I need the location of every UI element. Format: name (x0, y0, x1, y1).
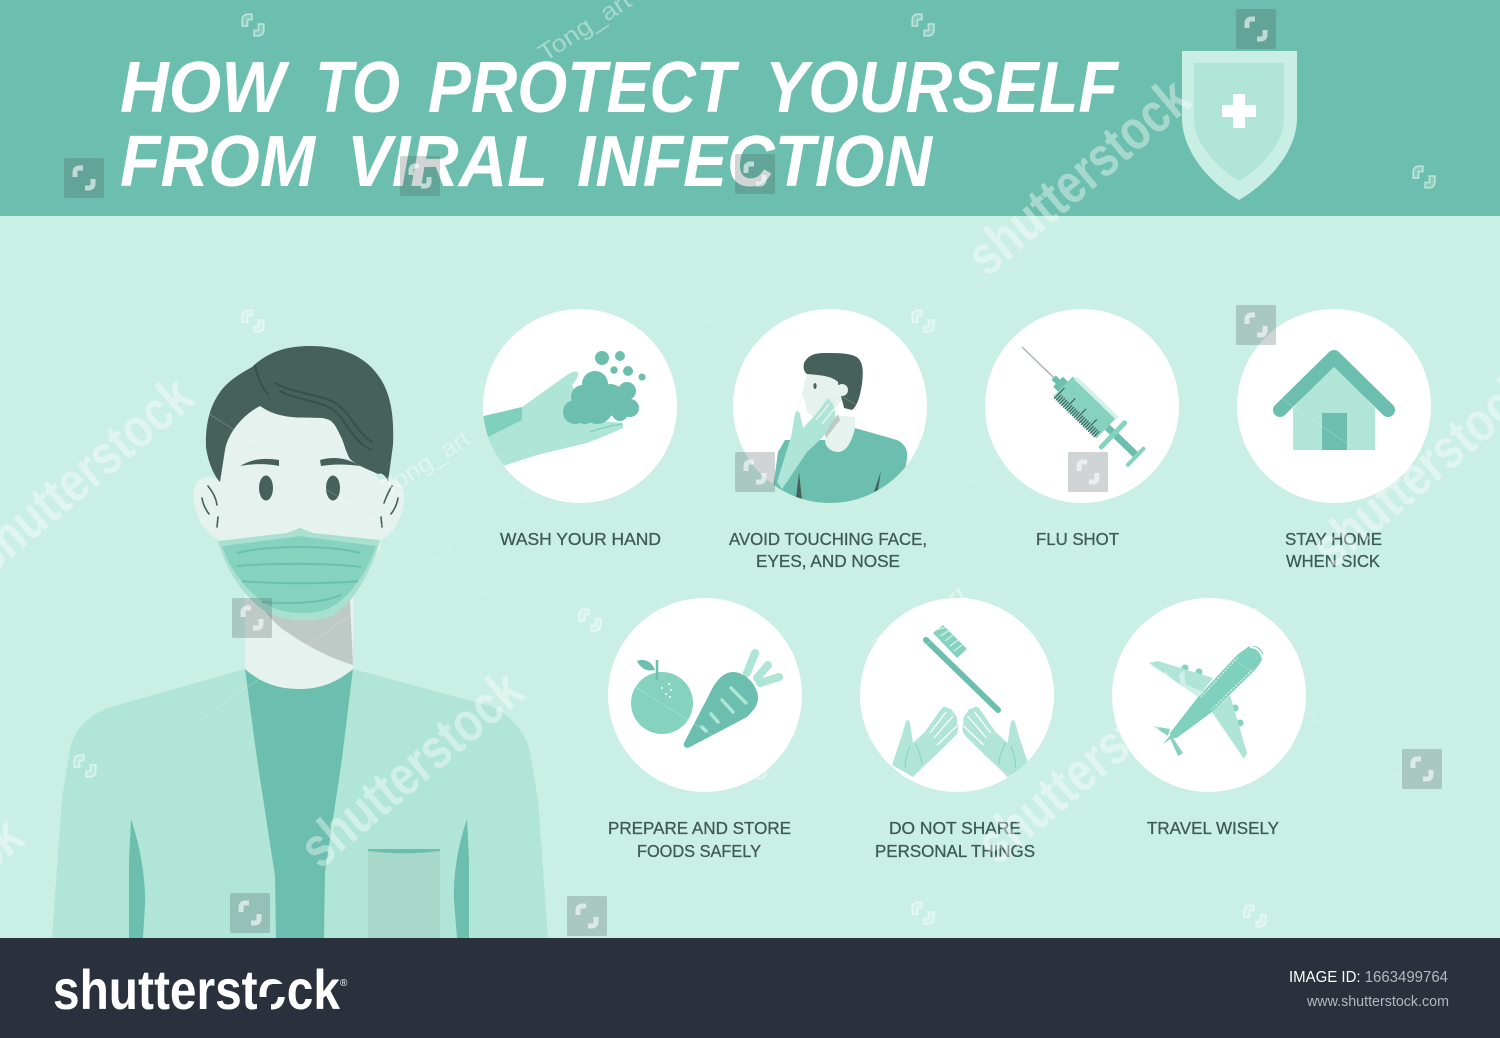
house body (1293, 364, 1375, 450)
caption: do not share: DO NOT SHARE (889, 818, 1021, 838)
title (120, 48, 1120, 202)
soap foam (563, 351, 646, 424)
caption: flu shot: FLU SHOT (1036, 529, 1119, 549)
caption: avoid touching face: EYES, AND NOSE (756, 551, 900, 571)
header band (0, 0, 1500, 216)
icon circle: wash your hand (480, 309, 677, 503)
ear of small figure (838, 384, 848, 396)
plane tail (1153, 726, 1183, 756)
jacket creases (129, 819, 469, 938)
sleeve folds (796, 471, 881, 500)
left ear (194, 477, 228, 541)
barrel highlight (1074, 376, 1119, 420)
ear details (202, 486, 398, 527)
caption: wash your hand: WASH YOUR HAND (500, 529, 661, 549)
orange (631, 672, 693, 734)
plane wings (1149, 661, 1247, 759)
caption: travel wisely: TRAVEL WISELY (1147, 818, 1279, 838)
mask pleats (237, 547, 361, 603)
raised hand (777, 398, 835, 489)
plunger plate (1125, 446, 1146, 467)
gloved hands (892, 707, 1029, 777)
icon circle: do not share personal things (860, 598, 1054, 792)
caption: avoid touching face (729, 529, 927, 571)
right ear (372, 478, 404, 541)
carrot greens (747, 653, 779, 683)
toothbrush bristles (933, 625, 967, 658)
footer logo: ® (340, 978, 348, 989)
pocket edge (368, 849, 440, 853)
illustration: man wearing a face mask (52, 346, 548, 938)
watermark overlay: Tong_art (377, 425, 475, 502)
title: PROTECT (428, 48, 740, 128)
watermark overlay: shutterstock (964, 653, 1212, 875)
hair strands (255, 366, 372, 450)
shirt of small figure (774, 428, 908, 503)
caption: prepare and store: PREPARE AND STORE (608, 818, 791, 838)
icon circle: flu shot syringe (985, 309, 1179, 503)
shirt (245, 669, 353, 938)
title: VIRAL (347, 122, 548, 202)
footer logo: shutterstock (53, 958, 341, 1021)
face (220, 402, 380, 590)
plane fuselage (1170, 646, 1263, 738)
caption: stay home when sick: WHEN SICK (1286, 551, 1380, 571)
mask fabric (222, 536, 376, 613)
bristle lines (936, 627, 962, 651)
eye of small figure (813, 383, 817, 389)
footer image id: IMAGE ID: 1663499764 (1289, 969, 1448, 986)
house door (1322, 413, 1347, 450)
caption: prepare and store (608, 818, 791, 861)
footer website: www.shutterstock.com (1306, 994, 1449, 1010)
neck shadow (824, 414, 840, 438)
flange (1098, 419, 1128, 450)
title: YOURSELF (765, 48, 1120, 128)
watermark overlay: shutterstock (287, 657, 535, 879)
icon: shield with cross (1182, 51, 1297, 200)
caption: prepare and store: FOODS SAFELY (637, 841, 761, 861)
title: TO (315, 48, 400, 128)
orange stem (656, 660, 658, 680)
jacket (52, 669, 548, 938)
icon circle: stay home (1237, 309, 1431, 503)
plunger rod (1105, 425, 1139, 458)
plane nose (1250, 647, 1263, 660)
watermark overlay: Tong_art (869, 580, 972, 660)
caption: stay home when sick: STAY HOME (1285, 529, 1382, 549)
icon circle: prepare and store foods (608, 598, 802, 792)
needle (1022, 347, 1054, 378)
syringe barrel (1053, 377, 1116, 438)
plane window lines (1200, 657, 1252, 710)
face of small figure (802, 372, 842, 417)
title: FROM (120, 122, 317, 202)
eyes (259, 476, 340, 500)
neck shadow (258, 600, 353, 665)
title: INFECTION (577, 122, 934, 202)
toothbrush handle (926, 640, 998, 710)
carrot marks (702, 688, 746, 731)
caption: do not share: PERSONAL THINGS (875, 841, 1035, 861)
neck of small figure (825, 415, 855, 452)
plane engines (1182, 664, 1244, 726)
eyebrows (240, 458, 360, 466)
hand and sleeve (480, 372, 623, 470)
barrel tick marks (1054, 388, 1104, 437)
caption: stay home when sick (1285, 529, 1382, 571)
caption: do not share (875, 818, 1035, 861)
orange leaf (637, 660, 655, 671)
neck (245, 590, 353, 689)
hair (206, 346, 393, 482)
pocket (368, 849, 440, 938)
footer bar (0, 938, 1500, 1038)
house roof (1280, 357, 1388, 410)
carrot (684, 672, 758, 748)
icon circle: avoid touching face (733, 309, 927, 510)
title: HOW (120, 48, 291, 128)
hair of small figure (804, 353, 863, 410)
watermark overlay: shutterstock (954, 65, 1202, 287)
palm crease (590, 424, 622, 432)
face mask (218, 528, 380, 620)
orange dots (661, 683, 672, 698)
syringe hub (1049, 373, 1069, 392)
icon circle: travel wisely airplane (1112, 598, 1306, 792)
caption: avoid touching face: AVOID TOUCHING FACE, (729, 529, 927, 549)
